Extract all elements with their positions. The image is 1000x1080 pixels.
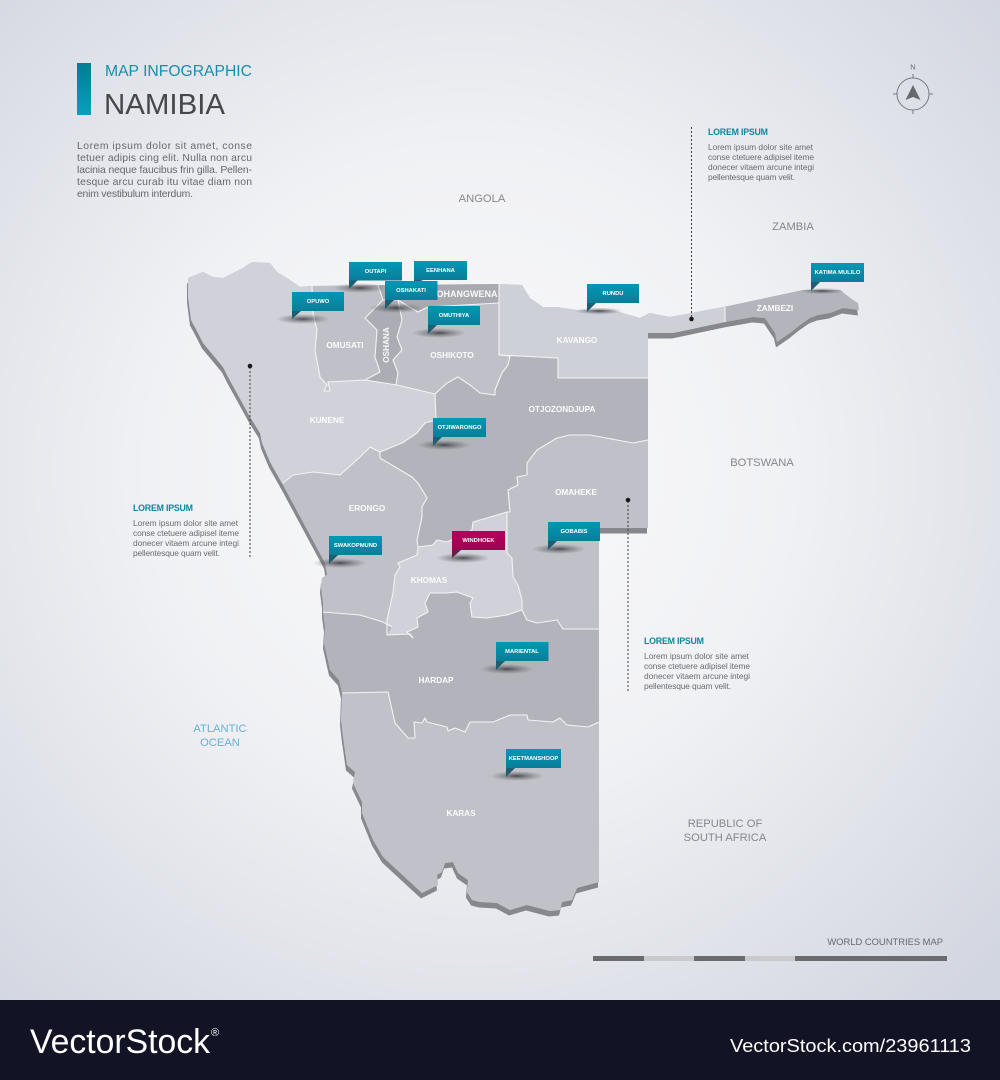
scale caption: WORLD COUNTRIES MAP bbox=[827, 936, 943, 947]
callout text: conse ctetuere adipisel iteme bbox=[708, 152, 814, 162]
callout text: donecer vitaem arcune integi bbox=[644, 671, 750, 681]
leader line bbox=[690, 127, 692, 318]
country labels bbox=[193, 193, 814, 844]
leader line bbox=[627, 501, 629, 692]
city flag: Keetmanshoop: KEETMANSHOOP bbox=[509, 756, 558, 762]
city flag: Swakopmund: SWAKOPMUND bbox=[334, 543, 377, 549]
callout heading: LOREM IPSUM bbox=[133, 503, 193, 513]
intro paragraph bbox=[77, 141, 252, 200]
map extrusion bbox=[187, 268, 858, 916]
city flag: Katima Mulilo bbox=[800, 263, 864, 294]
region: Kunene bbox=[188, 262, 436, 485]
callout: top right bbox=[689, 127, 814, 321]
region: Omusati bbox=[312, 285, 383, 391]
region labels: OHANGWENA bbox=[436, 289, 498, 299]
region labels: KAVANGO bbox=[557, 336, 598, 345]
region labels: OMUSATI bbox=[326, 341, 364, 350]
compass north: N bbox=[910, 62, 916, 72]
footer image id: VectorStock.com/23961113 bbox=[730, 1036, 971, 1056]
city flag: Oshakati bbox=[369, 281, 438, 313]
region labels: KHOMAS bbox=[411, 576, 448, 585]
region: Kavango bbox=[499, 284, 725, 378]
city flag: Mariental: MARIENTAL bbox=[505, 649, 539, 655]
callout text: conse ctetuere adipisel iteme bbox=[644, 661, 750, 671]
city flag: Opuwo: OPUWO bbox=[307, 299, 330, 305]
country labels: OCEAN bbox=[200, 737, 240, 749]
city flag: Opuwo bbox=[276, 292, 344, 324]
country labels: ANGOLA bbox=[459, 193, 506, 205]
intro paragraph: tesque arcu curab itu vitae diam non bbox=[77, 177, 252, 188]
city flag: Omuthiya bbox=[412, 306, 480, 338]
intro paragraph: enim vestibulum interdum. bbox=[77, 189, 193, 200]
intro paragraph: Lorem ipsum dolor sit amet, conse bbox=[77, 141, 252, 152]
region labels: OSHANA bbox=[382, 327, 391, 363]
region labels: OTJOZONDJUPA bbox=[529, 405, 595, 414]
map base bbox=[188, 262, 859, 911]
country labels: BOTSWANA bbox=[730, 457, 794, 469]
callout text bbox=[133, 518, 239, 558]
city flag: Otjiwarongo: OTJIWARONGO bbox=[437, 425, 482, 431]
region labels: HARDAP bbox=[418, 676, 454, 685]
kicker: MAP INFOGRAPHIC bbox=[105, 63, 252, 80]
callout text bbox=[644, 651, 750, 691]
region: Oshikoto bbox=[393, 300, 510, 395]
callout text: Lorem ipsum dolor site amet bbox=[644, 651, 750, 661]
region borders bbox=[283, 284, 725, 738]
leader dot bbox=[626, 498, 630, 502]
city flag: Keetmanshoop bbox=[490, 749, 561, 781]
scale bar bbox=[593, 936, 947, 961]
region: Zambezi bbox=[725, 290, 859, 342]
intro paragraph: lacinia neque faucibus frin gilla. Pellen- bbox=[77, 165, 252, 176]
city flag: Windhoek (capital) bbox=[436, 531, 505, 563]
country labels: SOUTH AFRICA bbox=[684, 832, 767, 844]
region labels bbox=[310, 289, 793, 818]
title accent bar bbox=[77, 63, 91, 115]
callout text: donecer vitaem arcune integi bbox=[708, 162, 814, 172]
leader dot bbox=[248, 364, 252, 368]
callout text: pellentesque quam velit. bbox=[644, 681, 731, 691]
region: Khomas bbox=[387, 512, 522, 638]
city flag: Rundu bbox=[575, 284, 639, 314]
footer brand: VectorStock bbox=[30, 1023, 211, 1061]
city flag: Rundu: RUNDU bbox=[603, 291, 623, 297]
callout text: Lorem ipsum dolor site amet bbox=[133, 518, 239, 528]
city flag: Mariental bbox=[480, 642, 548, 674]
region labels: ZAMBEZI bbox=[757, 304, 793, 313]
city flag: Swakopmund bbox=[313, 536, 382, 568]
title block bbox=[77, 63, 252, 121]
callout text bbox=[708, 142, 814, 182]
country labels: ATLANTIC bbox=[193, 723, 247, 735]
region: Hardap bbox=[323, 592, 599, 738]
city flag: Gobabis: GOBABIS bbox=[560, 529, 588, 535]
region: Karas bbox=[341, 692, 599, 911]
region labels: OMAHEKE bbox=[555, 488, 597, 497]
region labels: KUNENE bbox=[310, 416, 345, 425]
country labels: REPUBLIC OF bbox=[688, 818, 762, 830]
region labels: ERONGO bbox=[349, 504, 386, 513]
country labels: ZAMBIA bbox=[772, 221, 814, 233]
region: Ohangwena bbox=[378, 284, 499, 312]
callout text: pellentesque quam velit. bbox=[708, 172, 795, 182]
callout heading: LOREM IPSUM bbox=[644, 636, 704, 646]
icon: compass bbox=[893, 62, 933, 114]
region: Otjozondjupa bbox=[380, 356, 648, 547]
callout text: conse ctetuere adipisel iteme bbox=[133, 528, 239, 538]
registered mark: ® bbox=[211, 1027, 219, 1039]
region: Oshana bbox=[365, 300, 402, 385]
city flag: Outapi bbox=[333, 262, 402, 293]
region labels: KARAS bbox=[446, 809, 476, 818]
city flag: Oshakati: OSHAKATI bbox=[396, 288, 426, 294]
callout text: donecer vitaem arcune integi bbox=[133, 538, 239, 548]
city flag: Outapi: OUTAPI bbox=[365, 269, 387, 275]
leader line bbox=[249, 367, 251, 558]
footer band bbox=[0, 1000, 1000, 1080]
city flag: Eenhana bbox=[414, 261, 467, 284]
compass arrow bbox=[906, 85, 920, 100]
callout: lower right bbox=[626, 498, 750, 692]
callout heading: LOREM IPSUM bbox=[708, 127, 768, 137]
city flag: Gobabis bbox=[532, 522, 600, 554]
region labels: OSHIKOTO bbox=[430, 351, 474, 360]
intro paragraph: tetuer adipis cing elit. Nulla non arcu bbox=[77, 153, 252, 164]
city flag: Katima Mulilo: KATIMA MULILO bbox=[815, 270, 861, 276]
city flag: Eenhana: EENHANA bbox=[426, 268, 456, 274]
leader dot bbox=[689, 317, 694, 321]
city flag: Otjiwarongo bbox=[417, 418, 486, 450]
map of Namibia bbox=[187, 262, 859, 916]
callout text: Lorem ipsum dolor site amet bbox=[708, 142, 814, 152]
city flag: Omuthiya: OMUTHIYA bbox=[439, 313, 470, 319]
region: Erongo bbox=[283, 447, 427, 627]
title: NAMIBIA bbox=[104, 89, 226, 121]
region: Omaheke bbox=[507, 435, 648, 629]
city flag: Windhoek (capital): WINDHOEK bbox=[462, 538, 495, 544]
callout text: pellentesque quam velit. bbox=[133, 548, 220, 558]
callout: left bbox=[133, 364, 252, 558]
